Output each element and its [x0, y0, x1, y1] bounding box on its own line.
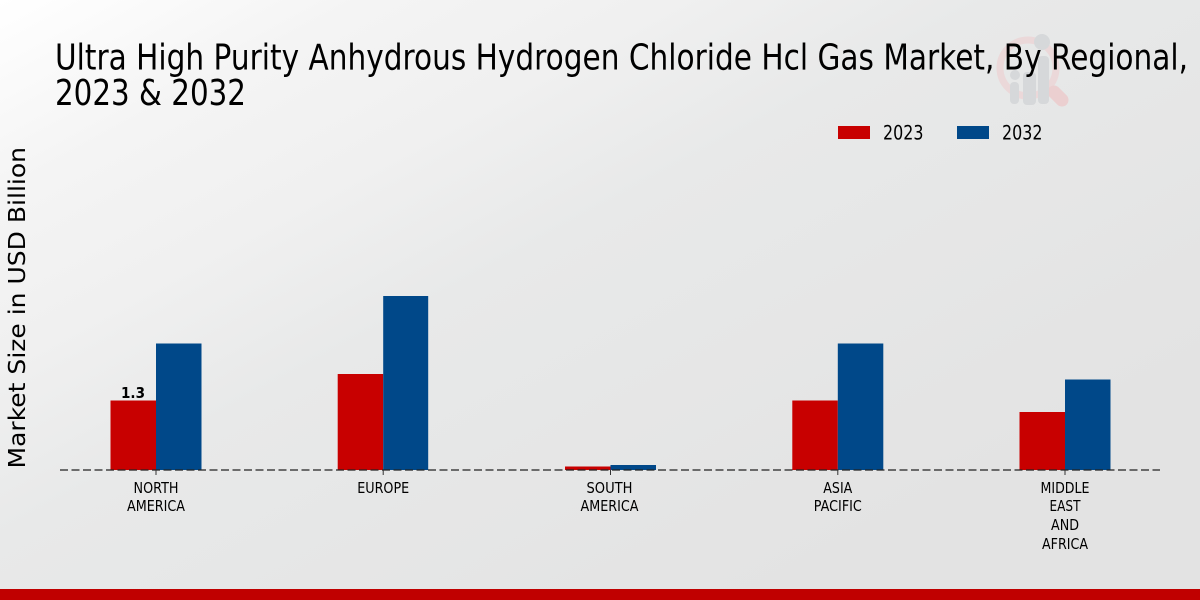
- footer bar: [0, 589, 1200, 600]
- bars: Asia Pacific: [792, 344, 883, 470]
- label: North America: AMERICA: [127, 497, 185, 515]
- label: South America: [580, 479, 639, 515]
- label: Middle East and Africa: [1040, 479, 1090, 553]
- bars: Europe: [338, 296, 428, 470]
- title: 2023 & 2032: [55, 73, 246, 114]
- baseline axis: [60, 470, 1160, 475]
- legend: [838, 122, 1042, 144]
- bars: South America: [565, 465, 656, 470]
- label: Middle East and Africa: AFRICA: [1042, 535, 1088, 553]
- label: Middle East and Africa: EAST: [1050, 497, 1081, 515]
- legend item: 2032: [957, 122, 1042, 144]
- legend item: 2023: [838, 122, 924, 144]
- label: Asia Pacific: PACIFIC: [814, 497, 862, 515]
- category labels: [127, 479, 1090, 553]
- label: South America: SOUTH: [586, 479, 632, 497]
- label: Asia Pacific: [814, 479, 862, 515]
- label: Middle East and Africa: AND: [1051, 516, 1079, 534]
- legend item: 2023: 2023: [883, 122, 924, 144]
- bars: Middle East and Africa: [1020, 380, 1110, 470]
- icon: watermark logo: [1000, 34, 1062, 105]
- y axis label: Market Size in USD Billion: [3, 147, 31, 468]
- label: Europe: EUROPE: [357, 479, 409, 497]
- title: [55, 38, 1188, 114]
- label: Asia Pacific: ASIA: [823, 479, 853, 497]
- label: South America: AMERICA: [580, 497, 639, 515]
- bar chart: [60, 296, 1160, 553]
- bars: North America: [110, 344, 202, 470]
- label: North America: NORTH: [134, 479, 178, 497]
- label: Middle East and Africa: MIDDLE: [1040, 479, 1090, 497]
- data label: 1.3: 1.3: [121, 384, 145, 402]
- legend item: 2032: 2032: [1002, 122, 1042, 144]
- label: North America: [127, 479, 185, 515]
